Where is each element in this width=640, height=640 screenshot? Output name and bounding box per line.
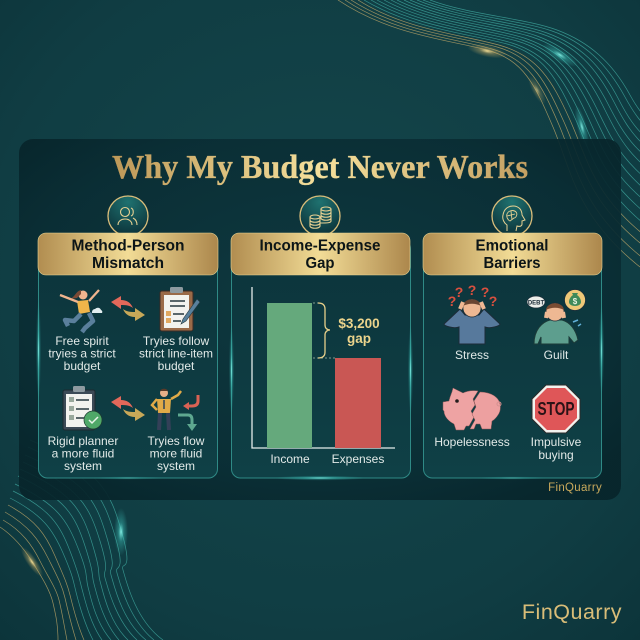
icon: rigid planner clipboard — [63, 386, 102, 430]
icon: stop sign — [532, 385, 580, 433]
logo: FinQuarry — [522, 600, 622, 624]
icon: stressed person — [444, 282, 500, 344]
card body — [232, 240, 410, 478]
icon: man with flow arrows — [152, 389, 198, 431]
decorative curves: bottom left — [0, 440, 163, 640]
heading — [423, 233, 602, 275]
icon: stressed person: ? — [448, 293, 456, 309]
text: tryies follow: budget — [158, 359, 195, 373]
panel: income-expense gap — [231, 196, 410, 478]
icon: guilty person with debt: $ — [573, 297, 578, 306]
text: tryies follow: Tryies follow — [143, 334, 209, 348]
bar: expenses — [335, 358, 381, 448]
icon: broken piggy bank — [443, 388, 501, 430]
text: guilt: Guilt — [544, 348, 569, 362]
title: Why My Budget Never Works — [112, 149, 528, 186]
text: free spirit: Free spirit — [55, 334, 109, 348]
text: impulsive buying: Impulsive — [531, 435, 582, 449]
icon: stressed person: ? — [468, 282, 476, 298]
text: tryies follow: strict line-item — [139, 346, 213, 360]
text: rigid planner: system — [64, 459, 102, 473]
icon: stressed person: ? — [481, 284, 489, 300]
icon: free spirit jumping — [60, 290, 102, 332]
icon: people — [108, 196, 148, 236]
heading — [231, 233, 410, 275]
heading: Method-Person — [72, 238, 184, 254]
panel: method-person mismatch — [38, 196, 218, 478]
heading: Mismatch — [92, 255, 164, 272]
card body — [424, 240, 602, 478]
bar: income — [267, 303, 312, 448]
heading: Barriers — [484, 255, 541, 272]
bar chart — [252, 287, 395, 466]
text: rigid planner: Rigid planner — [48, 434, 118, 448]
heading — [38, 233, 218, 275]
text: tryies flow: system — [157, 459, 195, 473]
axis label: expenses: Expenses — [332, 452, 384, 466]
icon: checklist clipboard — [160, 287, 200, 331]
text: hopelessness: Hopelessness — [434, 435, 510, 449]
icon: coins — [300, 196, 340, 236]
text: free spirit: budget — [64, 359, 101, 373]
panel: emotional barriers — [423, 196, 602, 478]
icon: arrows — [111, 296, 145, 321]
text: stress: Stress — [455, 348, 489, 362]
gap label: $3,200 — [338, 316, 380, 331]
text: tryies flow: Tryies flow — [148, 434, 205, 448]
axis label: income: Income — [270, 452, 310, 466]
text: free spirit: tryies a strict — [48, 346, 116, 360]
brace — [318, 303, 330, 358]
gap connector lines — [313, 303, 335, 358]
text: rigid planner: a more fluid — [52, 446, 114, 460]
small logo: FinQuarry — [548, 482, 602, 494]
decorative curves: top right — [338, 0, 640, 267]
gap label: gap — [347, 331, 371, 346]
text: tryies flow: more fluid — [150, 446, 202, 460]
card edge glows — [36, 300, 604, 480]
text: impulsive buying: buying — [538, 448, 574, 462]
icon: guilty person with debt — [527, 290, 586, 344]
icon: stressed person: ? — [455, 284, 463, 300]
heading: Income-Expense — [260, 238, 381, 254]
heading: Emotional — [476, 238, 548, 254]
icon: stressed person: ? — [489, 293, 497, 309]
icon: guilty person with debt: DEBT — [528, 300, 544, 306]
main panel — [19, 139, 621, 500]
card body — [38, 240, 218, 478]
icon: brain head — [492, 196, 532, 236]
icon: arrows — [111, 396, 145, 421]
heading: Gap — [306, 255, 335, 272]
icon: stop sign: STOP — [538, 399, 574, 419]
